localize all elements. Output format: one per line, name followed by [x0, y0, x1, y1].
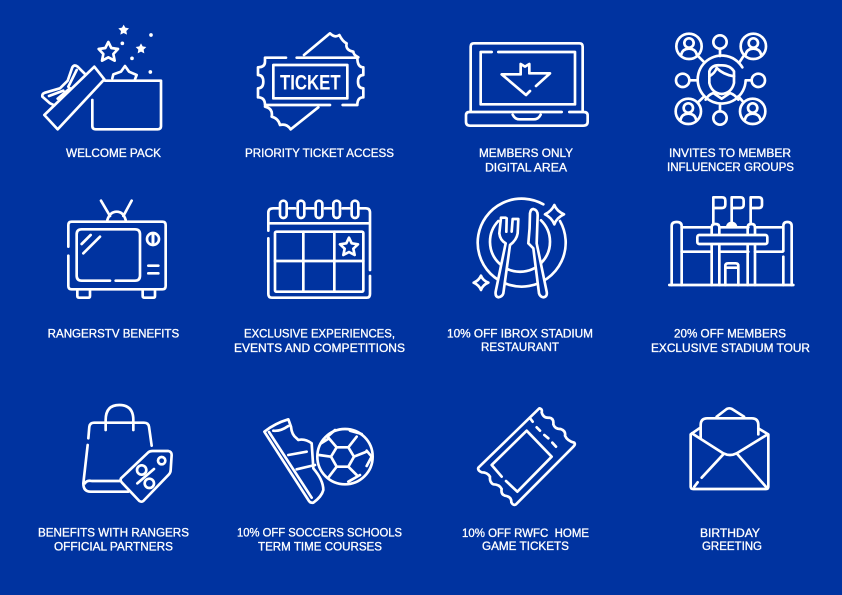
label: exclusive experiences: EVENTS AND COMPETITIONS: [234, 343, 405, 355]
label: birthday greeting: GREETING: [702, 541, 762, 553]
label: stadium tour: 20% OFF MEMBERS: [674, 328, 786, 340]
label: members only digital area: MEMBERS ONLY: [479, 148, 573, 160]
label: official partners: [38, 528, 189, 554]
label: priority ticket access: PRIORITY TICKET ACCESS: [245, 148, 394, 160]
label: invites to member influencer groups: INVITES TO MEMBER: [669, 148, 791, 160]
icon: member network: [676, 34, 766, 125]
label: ibrox stadium restaurant: RESTAURANT: [481, 342, 559, 354]
label: official partners: OFFICIAL PARTNERS: [54, 542, 173, 554]
label: stadium tour: EXCLUSIVE STADIUM TOUR: [651, 343, 810, 355]
label: members only digital area: DIGITAL AREA: [485, 162, 567, 174]
label: invites to member influencer groups: INFLUENCER GROUPS: [667, 162, 794, 174]
label: home game tickets: 10% OFF RWFC HOME: [462, 528, 589, 540]
icon: tickets: [258, 33, 363, 129]
label: soccer schools: [237, 528, 402, 554]
icon: tickets: TICKET: [280, 70, 341, 94]
label: ibrox stadium restaurant: 10% OFF IBROX STADIUM: [447, 328, 593, 340]
label: soccer schools: 10% OFF SOCCERS SCHOOLS: [237, 528, 402, 540]
label: home game tickets: [462, 528, 589, 553]
label: members only digital area: [479, 148, 573, 174]
label: exclusive experiences: [234, 328, 405, 355]
label: home game tickets: GAME TICKETS: [482, 541, 569, 553]
label: soccer schools: TERM TIME COURSES: [258, 542, 382, 554]
icon: gift box: [42, 25, 161, 129]
icon: open envelope: [691, 408, 768, 489]
icon: stadium: [669, 197, 793, 285]
label: rangerstv benefits: RANGERSTV BENEFITS: [48, 328, 180, 340]
icon: plate and cutlery: [474, 199, 566, 297]
label: birthday greeting: [700, 528, 762, 553]
icon: calendar: [268, 201, 370, 298]
label: exclusive experiences: EXCLUSIVE EXPERIENCES,: [244, 328, 395, 340]
label: official partners: BENEFITS WITH RANGERS: [38, 528, 189, 540]
icon: boot and football: [264, 419, 373, 503]
icon: shopping bag with discount tag: [83, 405, 172, 502]
icon: television: [68, 201, 166, 298]
label: welcome pack: WELCOME PACK: [66, 148, 161, 160]
icon: diagonal match ticket: [478, 408, 575, 505]
label: birthday greeting: BIRTHDAY: [700, 528, 760, 540]
icon: laptop: [466, 43, 588, 126]
label: stadium tour: [651, 328, 810, 355]
label: invites to member influencer groups: [667, 148, 794, 174]
label: ibrox stadium restaurant: [447, 328, 593, 354]
